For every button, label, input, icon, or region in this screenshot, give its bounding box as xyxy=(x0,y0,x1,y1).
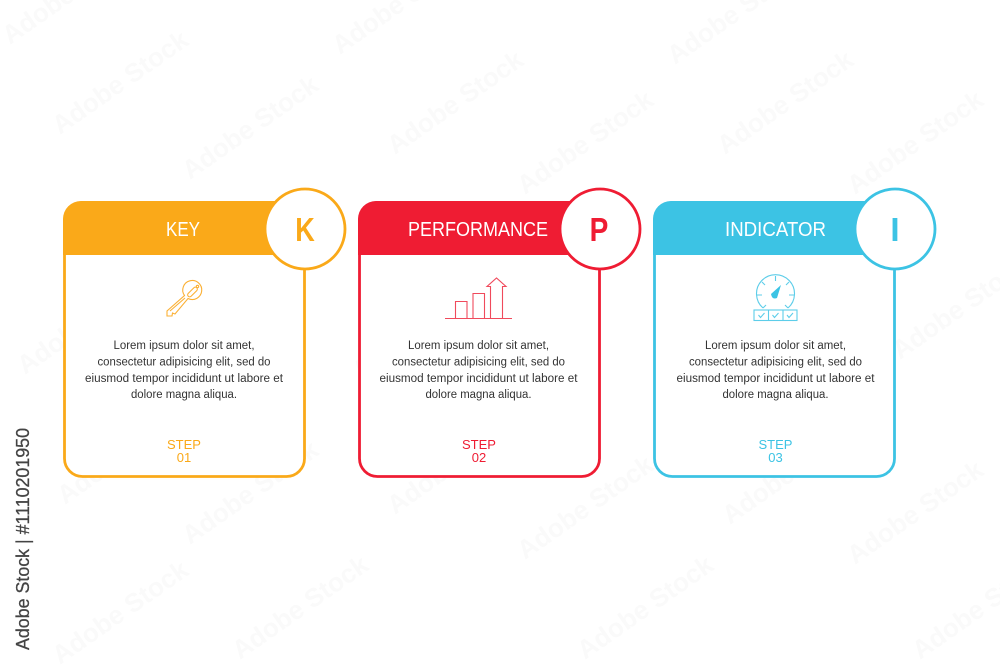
panel: performance xyxy=(358,189,640,476)
watermark pattern: Adobe Stock xyxy=(676,284,824,400)
text block: eiusmod tempor incididunt ut labore et xyxy=(676,373,875,385)
header band xyxy=(653,201,895,255)
letter badge P xyxy=(560,189,640,269)
text block: consectetur adipisicing elit, sed do xyxy=(98,356,270,368)
watermark pattern: Adobe Stock xyxy=(511,449,659,565)
text block xyxy=(676,340,875,401)
watermark pattern: Adobe Stock xyxy=(841,454,989,570)
card outline xyxy=(360,202,600,476)
step label xyxy=(462,437,496,465)
letter badge I: I xyxy=(890,211,900,248)
header band xyxy=(63,201,305,255)
watermark pattern: Adobe Stock xyxy=(51,394,199,510)
text block: dolore magna aliqua. xyxy=(426,389,532,401)
card outline xyxy=(654,202,894,476)
stock credit: Adobe Stock | #1110201950 xyxy=(12,428,33,650)
watermark pattern: Adobe Stock xyxy=(841,84,989,200)
watermark pattern: Adobe Stock xyxy=(46,24,194,140)
heading: KEY: KEY xyxy=(166,219,200,241)
icon: rising bar chart xyxy=(445,278,512,318)
watermark pattern: Adobe Stock xyxy=(716,414,864,530)
watermark pattern: Adobe Stock xyxy=(176,69,324,185)
header band xyxy=(358,201,600,255)
watermark pattern: Adobe Stock xyxy=(176,434,324,550)
step label: STEP xyxy=(759,437,792,452)
step label: 01 xyxy=(177,450,191,465)
heading: INDICATOR: INDICATOR xyxy=(725,219,826,241)
text block: dolore magna aliqua. xyxy=(131,389,237,401)
watermark pattern: Adobe Stock xyxy=(11,264,159,380)
heading: PERFORMANCE: PERFORMANCE xyxy=(408,219,548,241)
watermark pattern: Adobe Stock xyxy=(226,549,374,665)
watermark pattern: Adobe Stock xyxy=(511,84,659,200)
letter badge I xyxy=(855,189,935,269)
text block: Lorem ipsum dolor sit amet, xyxy=(705,340,846,352)
panel: key xyxy=(63,189,345,476)
letter badge K: K xyxy=(295,213,315,249)
icon: key xyxy=(167,281,202,316)
text block: consectetur adipisicing elit, sed do xyxy=(392,356,565,368)
watermark pattern: Adobe Stock xyxy=(711,44,859,160)
step label: STEP xyxy=(462,437,496,452)
text block: Lorem ipsum dolor sit amet, xyxy=(408,340,549,352)
card outline xyxy=(64,202,304,476)
step label xyxy=(167,437,201,465)
step label xyxy=(759,437,792,465)
text block: Lorem ipsum dolor sit amet, xyxy=(114,340,254,352)
text block: consectetur adipisicing elit, sed do xyxy=(689,356,862,368)
panel: indicator xyxy=(653,189,935,476)
letter badge K xyxy=(265,189,345,269)
step label: STEP xyxy=(167,437,201,452)
step label: 02 xyxy=(472,450,486,465)
text block: dolore magna aliqua. xyxy=(722,389,828,401)
icon: gauge with checks xyxy=(754,275,797,320)
watermark pattern: Adobe Stock xyxy=(381,44,529,160)
watermark pattern: Adobe Stock xyxy=(571,549,719,665)
letter badge P: P xyxy=(590,212,608,249)
step label: 03 xyxy=(768,450,783,465)
text block: eiusmod tempor incididunt ut labore et xyxy=(85,373,284,385)
watermark pattern: Adobe Stock xyxy=(346,269,494,385)
text block xyxy=(85,340,284,401)
text block xyxy=(380,340,578,401)
text block: eiusmod tempor incididunt ut labore et xyxy=(380,373,578,385)
watermark pattern: Adobe Stock xyxy=(381,404,529,520)
